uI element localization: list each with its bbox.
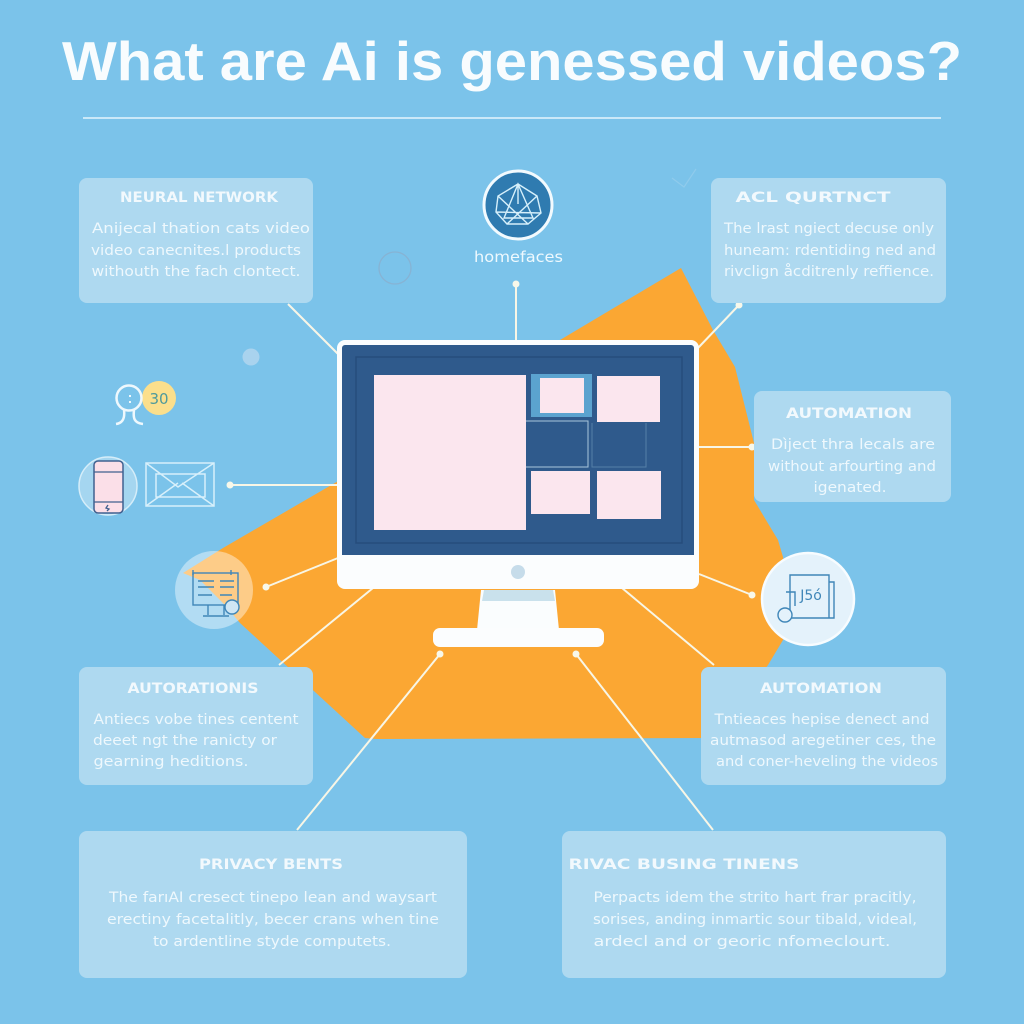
heading: acl qurtnct: ACL QURTNCT (736, 190, 891, 206)
label: homefaces: homefaces (474, 248, 563, 266)
text: acl qurtnct description: The lrast ngiect decuse only (723, 221, 934, 237)
icon: envelope (146, 463, 214, 506)
text: autorationis description: gearning heditions. (94, 754, 248, 770)
orange background shape (183, 268, 790, 739)
text: neural network description: Anijecal thation cats video (92, 221, 310, 237)
icon: homefaces network emblem (484, 171, 552, 239)
icon: calendar monitor (175, 551, 253, 629)
heading: privacy bents: PRIVACY BENTS (199, 857, 343, 873)
text: acl qurtnct description: huneam: rdentiding ned and (724, 243, 936, 259)
panel: neural network (79, 178, 313, 303)
icon: phone (79, 457, 137, 515)
text: neural network description (91, 221, 310, 280)
text: automation lower right description: Tntieaces hepise denect and (713, 712, 930, 728)
text: automation right description (768, 437, 936, 496)
heading: rivac busing tinens: RIVAC BUSING TINENS (568, 857, 800, 873)
heading: neural network: NEURAL NETWORK (120, 190, 279, 206)
text: rivac busing tinens description: Perpacts idem the strito hart frar pracitly, (594, 890, 916, 906)
text: privacy bents description: erectiny facetalitly, becer crans when tine (107, 912, 439, 928)
text: privacy bents description: The farıAI cresect tinepo lean and waysart (108, 890, 437, 906)
text: privacy bents description (107, 890, 439, 950)
screen tiles (374, 374, 661, 530)
heading: automation right: AUTOMATION (786, 406, 912, 422)
text: neural network description: withouth the fach clontect. (92, 264, 300, 280)
text: rivac busing tinens description: ardecl and or georic nfomeclourt. (594, 934, 890, 950)
icon: character with 30 badge: 30 (149, 390, 169, 408)
icon: document with music note: J5ó (799, 588, 822, 604)
text: autorationis description: deeet ngt the ranicty or (93, 733, 277, 749)
text: automation right description: without arfourting and (768, 459, 936, 475)
text: automation lower right description: autmasod aregetiner ces, the (710, 733, 936, 749)
text: automation lower right description: and coner-heveling the videos (716, 754, 938, 770)
panel: automation right (754, 391, 951, 502)
connector lines (226, 280, 756, 830)
text: privacy bents description: to ardentline styde computets. (153, 934, 391, 950)
text: automation lower right description (710, 712, 938, 770)
panel: privacy bents (79, 831, 467, 978)
panel: acl qurtnct (711, 178, 946, 303)
panel: rivac busing tinens (562, 831, 946, 978)
icon: character with 30 badge (116, 381, 176, 424)
icon: document with music note (762, 553, 854, 645)
text: neural network description: video canecnites.l products (91, 243, 301, 259)
text: acl qurtnct description (723, 221, 936, 280)
text: automation right description: igenated. (814, 480, 886, 496)
title: What are Ai is genessed videos? (62, 30, 962, 92)
text: rivac busing tinens description (593, 890, 917, 950)
text: autorationis description: Antiecs vobe tines centent (94, 712, 299, 728)
text: rivac busing tinens description: sorises, anding inmartic sour tibald, videal, (593, 912, 917, 928)
heading: automation lower right: AUTOMATION (760, 681, 882, 697)
text: automation right description: Dìject thra lecals are (771, 437, 935, 453)
panel: automation lower right (701, 667, 946, 785)
panel: autorationis (79, 667, 313, 785)
monitor (337, 340, 699, 647)
text: autorationis description (93, 712, 299, 770)
heading: autorationis: AUTORATIONIS (128, 681, 258, 697)
text: acl qurtnct description: rivclign åcditrenly reffience. (724, 263, 934, 280)
